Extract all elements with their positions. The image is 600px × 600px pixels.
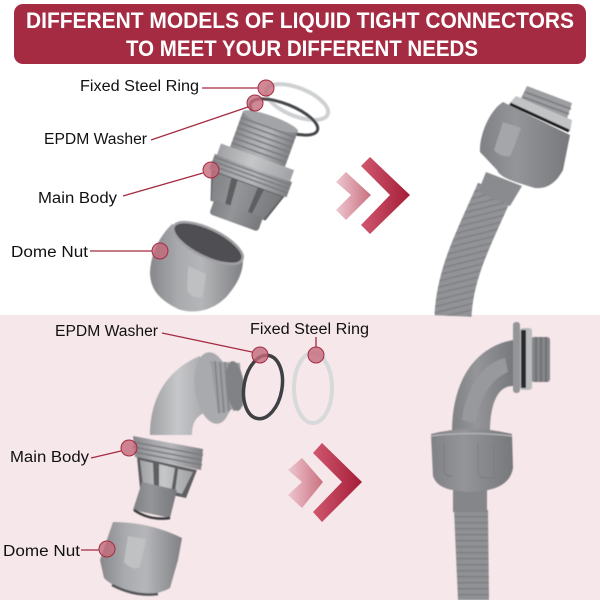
- opening: [223, 360, 247, 412]
- thread: [210, 361, 243, 414]
- collar: [133, 482, 177, 518]
- hose: [454, 510, 489, 600]
- fingers: [137, 457, 197, 498]
- label: Dome Nut (top): Dome Nut: [11, 244, 89, 261]
- assembled straight connector: [453, 86, 572, 316]
- neck: [453, 490, 487, 512]
- steel ring and washer: [508, 96, 572, 132]
- elbow tube: [150, 356, 212, 435]
- label: EPDM Washer (lower): [55, 323, 268, 363]
- label: Dome Nut (top): [11, 243, 168, 261]
- thread: [518, 86, 572, 125]
- label: Main Body (lower): [10, 440, 137, 466]
- label: Fixed Steel Ring (top): Fixed Steel Ring: [80, 78, 199, 95]
- lower threaded ring: [133, 436, 203, 470]
- label: Dome Nut (lower): Dome Nut: [3, 543, 81, 560]
- flange: [190, 350, 236, 426]
- label: Main Body (lower): Main Body: [10, 449, 89, 466]
- flange: [513, 322, 520, 393]
- title banner: DIFFERENT MODELS OF LIQUID TIGHT CONNECTORS: [26, 8, 574, 33]
- label: Dome Nut (lower): [3, 541, 115, 560]
- hose: [453, 190, 495, 316]
- label: Fixed Steel Ring (lower): Fixed Steel Ring: [250, 321, 369, 338]
- nut: [480, 102, 570, 188]
- title banner: TO MEET YOUR DIFFERENT NEEDS: [126, 36, 478, 61]
- part: main body: [195, 102, 311, 237]
- nut: [431, 429, 513, 492]
- label: Fixed Steel Ring (lower): [250, 321, 369, 363]
- steel ring and washer: [520, 328, 532, 390]
- neck: [478, 172, 522, 206]
- exploded straight connector: [150, 77, 333, 311]
- label: Fixed Steel Ring (top): [80, 78, 274, 96]
- arrow: lower double chevron: [288, 443, 362, 522]
- label: Main Body (top): Main Body: [38, 190, 117, 207]
- label: EPDM Washer (lower): EPDM Washer: [55, 323, 158, 340]
- elbow tube: [452, 340, 514, 432]
- arrow: top double chevron: [336, 157, 410, 234]
- label: EPDM Washer (top): [44, 95, 263, 148]
- thread: [531, 337, 550, 382]
- label: EPDM Washer (top): EPDM Washer: [44, 131, 147, 148]
- dome nut: [100, 522, 182, 594]
- part: fixed steel ring: [261, 77, 333, 127]
- assembled elbow connector: [431, 322, 550, 600]
- part: fixed steel ring (lower): [294, 353, 332, 423]
- exploded elbow connector: [100, 350, 247, 595]
- part: dome nut: [150, 214, 248, 311]
- panel: lower pink background: [0, 315, 600, 600]
- part: EPDM washer (lower): [239, 352, 287, 422]
- title banner: [14, 4, 586, 64]
- part: EPDM washer: [246, 91, 322, 143]
- label: Main Body (top): [38, 162, 219, 207]
